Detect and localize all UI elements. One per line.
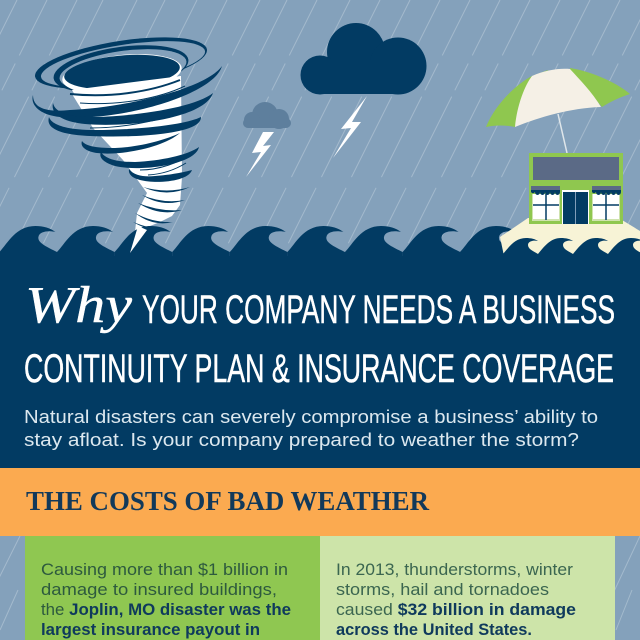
panel: Joplin: largest insurance payout in [41, 621, 260, 639]
panel: 2013 damage: caused $32 billion in damage [336, 601, 576, 619]
tornado tip over wave [130, 226, 147, 253]
panel: 2013 damage: across the United States. [336, 621, 532, 639]
intro text: Natural disasters can severely compromise a business’ ability to [24, 407, 598, 427]
intro text: stay afloat. Is your company prepared to weather the storm? [24, 430, 579, 450]
panel: title [24, 277, 615, 391]
tornado [32, 28, 222, 232]
icon: small lightning bolt [246, 132, 274, 177]
icon: umbrella and shop [486, 68, 640, 256]
umbrella canopy [486, 68, 630, 127]
tornado funnel [72, 76, 182, 232]
icon: small storm cloud [243, 102, 291, 129]
title word: Why: Why [25, 277, 133, 334]
sand island [500, 218, 640, 256]
icon: large lightning bolt [333, 96, 367, 158]
panel: Joplin: Causing more than $1 billion in [41, 561, 288, 579]
intro text [24, 407, 598, 450]
tornado spiral bands [32, 66, 222, 230]
panel: 2013 damage [320, 536, 615, 640]
panel: Joplin: the Joplin, MO disaster was the [41, 601, 291, 619]
panel: Joplin [25, 536, 320, 640]
tornado thin lines [80, 86, 190, 175]
panel: Joplin: damage to insured buildings, [41, 581, 277, 599]
icon: large storm cloud [300, 23, 426, 94]
tornado top rings [32, 28, 210, 100]
umbrella pole [558, 114, 567, 153]
panel: 2013 damage: In 2013, thunderstorms, winter [336, 561, 574, 579]
panel: 2013 damage: storms, hail and tornadoes [336, 581, 549, 599]
section banner: the costs of bad weather [0, 468, 640, 536]
foreground waves [503, 238, 640, 262]
shop building [529, 153, 623, 224]
section banner: the costs of bad weather: THE COSTS OF BAD WEATHER [26, 486, 429, 516]
waves [0, 226, 640, 468]
